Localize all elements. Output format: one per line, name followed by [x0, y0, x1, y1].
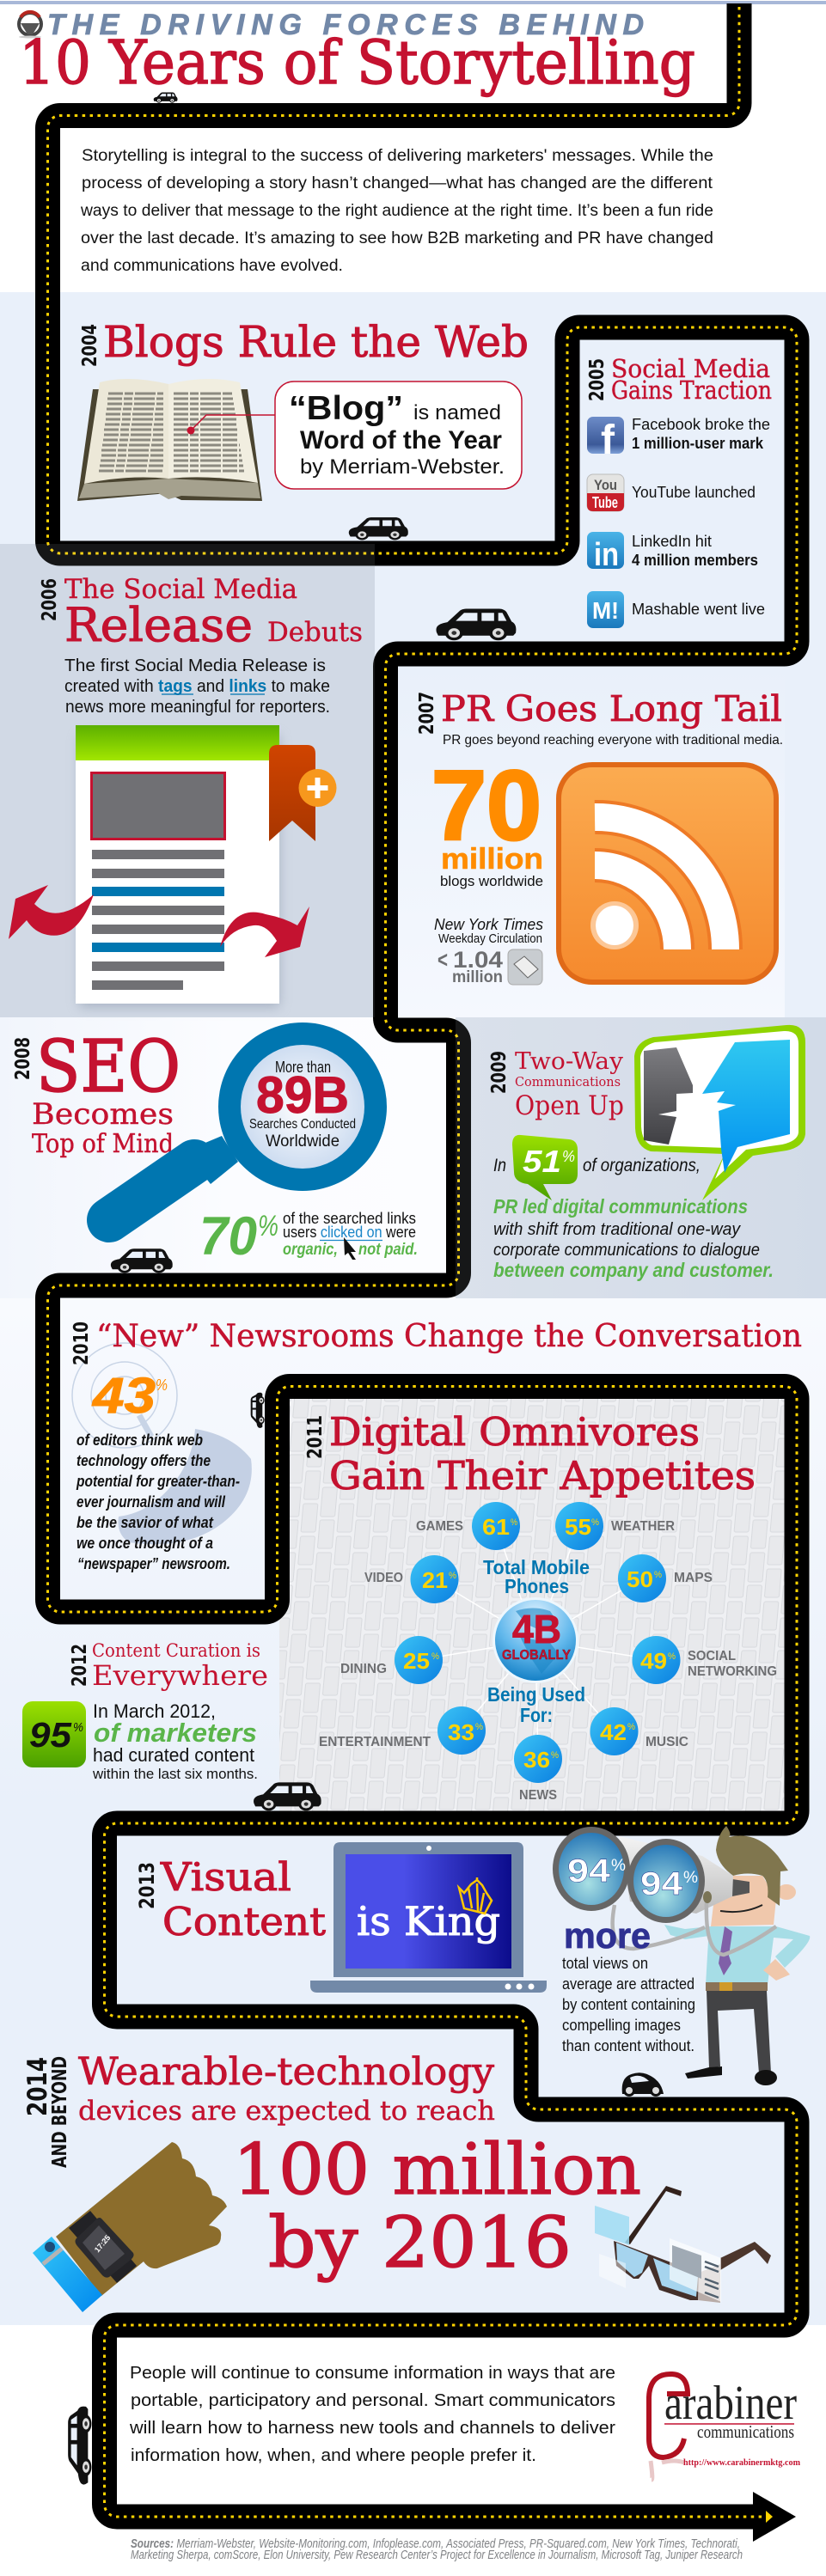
- chart labels: ENTERTAINMENT: [319, 1735, 431, 1749]
- heading: [64, 574, 363, 652]
- stat: 43 percent: %: [156, 1377, 168, 1394]
- chart: bubbles: %: [475, 1722, 483, 1732]
- description: created with tags and links to make: [64, 677, 330, 696]
- chart: bubbles: %: [431, 1651, 439, 1662]
- chart labels: MAPS: [674, 1571, 713, 1585]
- chart labels: MUSIC: [646, 1735, 688, 1749]
- chart: bubbles: 36: [523, 1747, 550, 1773]
- stat: 89B searches: 89B: [256, 1066, 349, 1124]
- icon: globe with 4B: GLOBALLY: [502, 1648, 571, 1663]
- heading: Debuts: [267, 617, 363, 648]
- icon: magnifying glass: [109, 1022, 387, 1220]
- heading: Two-Way: [515, 1048, 624, 1075]
- icon: car: [349, 517, 408, 540]
- chart labels: SOCIAL: [688, 1649, 736, 1663]
- icon: bookmark: [269, 745, 337, 841]
- heading: [32, 1025, 180, 1159]
- stat: 51 percent: [493, 1135, 701, 1200]
- heading: Gains Traction: [611, 375, 772, 405]
- connector lines: [419, 1526, 657, 1759]
- icon: facebook: [587, 417, 624, 463]
- stat: 70 percent organic: organic,: [283, 1241, 338, 1259]
- panel: 2014 wearables: [22, 2050, 771, 2312]
- description: ever journalism and will: [76, 1493, 226, 1511]
- linkedin text: LinkedIn hit: [632, 533, 712, 550]
- chart labels: [319, 1519, 777, 1803]
- stat: 70 percent organic: [199, 1206, 418, 1267]
- stat: 94 percent: %: [611, 1857, 626, 1875]
- stat: 70 million: 70: [431, 751, 541, 861]
- icon: car: [251, 1393, 265, 1428]
- intro text: process of developing a story hasn’t changed—what has changed are the different: [82, 174, 713, 192]
- stat: 51 percent: 51: [523, 1144, 561, 1179]
- heading: Wearable-technology: [78, 2050, 494, 2094]
- icon: youtube: You: [594, 477, 617, 493]
- icon: globe with 4B: [493, 1597, 578, 1683]
- caption: total mobile phones: Being Used: [487, 1683, 585, 1706]
- facebook text: [632, 416, 770, 452]
- description: had curated content: [93, 1744, 254, 1766]
- year: 2010: [70, 1322, 93, 1365]
- callout: word of the year: [187, 382, 522, 489]
- icon: laptop: [310, 1842, 547, 1993]
- year: 2008: [12, 1037, 34, 1080]
- heading: [160, 1854, 326, 1944]
- callout: word of the year: is named: [413, 401, 501, 424]
- description: more: [564, 1915, 651, 1956]
- description: [562, 1915, 695, 2054]
- heading: [515, 1048, 624, 1121]
- caption: total mobile phones: Total Mobile: [483, 1556, 590, 1578]
- icon: mashable: [587, 591, 624, 628]
- heading: Gain Their Appetites: [329, 1453, 756, 1499]
- panel: 2004 blogs: [77, 317, 529, 540]
- icon: facebook: f: [601, 418, 615, 463]
- panel: 2007 PR long tail: [416, 688, 783, 986]
- stat: 89B searches: More than: [275, 1059, 331, 1076]
- stat: 95 percent: %: [73, 1720, 83, 1735]
- closing text: information how, when, and where people prefer it.: [131, 2446, 536, 2465]
- caption: total mobile phones: Phones: [505, 1575, 569, 1597]
- year: 2012: [69, 1644, 91, 1687]
- description: than content without.: [562, 2037, 694, 2054]
- intro text: over the last decade. It’s amazing to see how B2B marketing and PR have changed: [81, 229, 713, 247]
- description: be the savior of what: [76, 1514, 214, 1531]
- stat: new york times: New York Times: [434, 916, 543, 933]
- chart: bubbles: 50: [627, 1566, 653, 1592]
- stat: 95 percent: 95: [29, 1715, 72, 1755]
- linkedin text: 4 million members: [632, 552, 758, 569]
- chart labels: WEATHER: [611, 1519, 675, 1534]
- icon: mashable: M!: [592, 597, 619, 624]
- stat: new york times: 1.04: [453, 947, 503, 973]
- heading: The Social Media: [64, 574, 297, 605]
- stat: 51 percent: %: [562, 1148, 575, 1165]
- chart: bubbles: 49: [640, 1648, 667, 1674]
- heading: Content: [162, 1899, 326, 1944]
- description: The first Social Media Release is: [64, 656, 326, 675]
- stat: 70 percent organic: 70: [199, 1206, 257, 1267]
- stat: 89B searches: Worldwide: [266, 1132, 340, 1151]
- heading: devices are expected to reach: [78, 2096, 495, 2127]
- panel: 2006 social media release: [9, 574, 363, 1007]
- heading: Open Up: [515, 1090, 624, 1121]
- heading: Becomes: [32, 1097, 174, 1132]
- heading: Content Curation is: [92, 1640, 260, 1661]
- icon: linkedin: in: [594, 537, 619, 573]
- chart: bubbles: %: [511, 1517, 517, 1528]
- chart: bubbles: %: [551, 1750, 559, 1761]
- linkedin text: [632, 533, 758, 569]
- heading: Visual: [160, 1854, 291, 1900]
- chart: bubbles: %: [668, 1651, 676, 1662]
- heading: [611, 354, 772, 405]
- stat: 100 million by 2016: [233, 2130, 641, 2284]
- callout: word of the year: Word of the Year: [300, 426, 502, 455]
- chart: bubbles: 61: [482, 1514, 510, 1540]
- heading: “New” Newsrooms Change the Conversation: [96, 1319, 802, 1354]
- logo: carabiner: communications: [697, 2421, 794, 2442]
- facebook text: Facebook broke the: [632, 416, 770, 433]
- icon: steering wheel: [19, 12, 41, 38]
- icon: crown: [459, 1877, 492, 1914]
- stat: 70 percent organic: %: [258, 1210, 278, 1242]
- description: [493, 1195, 774, 1281]
- year: 2014: [22, 2057, 53, 2116]
- chart: bubbles: 33: [448, 1719, 474, 1745]
- illustration: man with binoculars: [553, 1826, 810, 2085]
- subhead: PR goes beyond reaching everyone with traditional media.: [443, 733, 783, 748]
- panel: 2009 two-way: [488, 1025, 805, 1281]
- stat: 70 million: million: [441, 843, 543, 876]
- icon: car: [111, 1248, 173, 1273]
- heading: Blogs Rule the Web: [103, 317, 529, 367]
- chart: bubbles: 42: [600, 1719, 627, 1745]
- stat: 100 million by 2016: by 2016: [268, 2203, 572, 2284]
- stat: 70 percent organic: users clicked on were: [283, 1224, 416, 1241]
- description: news more meaningful for reporters.: [65, 698, 330, 717]
- heading: PR Goes Long Tail: [441, 688, 782, 729]
- heading: [329, 1409, 756, 1499]
- caption: total mobile phones: For:: [520, 1704, 553, 1726]
- chart labels: NETWORKING: [688, 1664, 777, 1679]
- stat: 95 percent: [22, 1701, 86, 1767]
- description: average are attracted: [562, 1975, 694, 1993]
- intro text: ways to deliver that message to the right audience at the right time. It’s been a fun ride: [80, 202, 713, 220]
- chart: bubbles: 25: [403, 1648, 430, 1674]
- icon: open book: [77, 379, 262, 501]
- arrow: red right: [220, 906, 309, 957]
- icon: smart glasses: [595, 2186, 771, 2303]
- document illustration: [76, 725, 279, 1007]
- icon: satellite dish: [72, 1343, 252, 1544]
- icon: car: [154, 93, 178, 103]
- heading: Release: [64, 598, 253, 652]
- closing text: portable, participatory and personal. Smart communicators: [131, 2391, 615, 2410]
- icon: arm with smartwatch: [33, 2142, 227, 2312]
- mashable text: Mashable went live: [632, 601, 765, 618]
- arrow: red left: [9, 885, 94, 939]
- icon: linkedin: [587, 532, 624, 573]
- description: of marketers: [94, 1718, 257, 1748]
- stat: 70 percent organic: of the searched links: [283, 1210, 416, 1227]
- stat: 89B searches: Searches Conducted: [249, 1117, 356, 1132]
- chart labels: NEWS: [519, 1788, 557, 1803]
- year: 2011: [304, 1415, 327, 1459]
- closing text: People will continue to consume information in ways that are: [130, 2364, 615, 2383]
- year: 2013: [135, 1862, 159, 1909]
- description: PR led digital communications: [493, 1195, 748, 1218]
- icon: car: [68, 2407, 91, 2485]
- chart: bubbles: %: [449, 1571, 456, 1581]
- stat: 51 percent: In: [493, 1156, 506, 1175]
- description: corporate communications to dialogue: [493, 1241, 760, 1260]
- chart: bubbles: %: [627, 1722, 635, 1732]
- icon: globe with 4B: 4B: [512, 1607, 561, 1651]
- heading: Top of Mind: [32, 1129, 174, 1159]
- icon: youtube: [587, 474, 624, 511]
- stat: 94 percent: %: [683, 1869, 698, 1887]
- icon: speech bubble: [634, 1025, 805, 1200]
- icon: laptop: is King: [357, 1898, 500, 1944]
- callout: word of the year: “Blog”: [289, 390, 403, 427]
- icon: arm with smartwatch: 17:25: [93, 2233, 112, 2254]
- description: [92, 1700, 258, 1782]
- heading: SEO: [36, 1025, 180, 1108]
- stat: 94 percent: 94: [640, 1866, 682, 1902]
- year: AND BEYOND: [49, 2056, 71, 2168]
- heading: Digital Omnivores: [329, 1409, 700, 1455]
- chart: bubbles: %: [591, 1517, 599, 1528]
- description: potential for greater-than-: [76, 1473, 240, 1490]
- panel: 2008 SEO: [12, 1022, 418, 1273]
- panel: 2011 digital omnivores: [304, 1409, 777, 1803]
- logo: carabiner: arabiner: [664, 2377, 797, 2430]
- heading: Communications: [515, 1074, 621, 1090]
- description: with shift from traditional one-way: [493, 1220, 741, 1239]
- youtube text: YouTube launched: [632, 484, 756, 501]
- intro text: [80, 147, 713, 275]
- stat: 43 percent: 43: [92, 1368, 156, 1424]
- chart labels: VIDEO: [364, 1571, 403, 1585]
- year: 2004: [79, 324, 101, 367]
- description: [76, 1431, 240, 1572]
- icon: rss: [556, 762, 779, 985]
- icon: car: [254, 1782, 321, 1810]
- icon: youtube: Tube: [592, 494, 618, 511]
- stat: new york times: <: [437, 947, 448, 973]
- chart: bubbles: 21: [422, 1567, 448, 1593]
- chart: bubbles: [395, 1502, 681, 1783]
- description: of editors think web: [76, 1431, 203, 1449]
- stat: 100 million by 2016: 100 million: [233, 2130, 641, 2211]
- closing text: [129, 2364, 615, 2465]
- stat: 51 percent: of organizations,: [583, 1156, 701, 1175]
- heading: Everywhere: [92, 1659, 268, 1692]
- intro text: and communications have evolved.: [81, 257, 343, 275]
- description: total views on: [562, 1955, 648, 1972]
- stat: new york times: Weekday Circulation: [438, 931, 542, 946]
- stat: new york times: [434, 916, 543, 986]
- description: within the last six months.: [92, 1766, 258, 1782]
- caption: total mobile phones: [483, 1556, 590, 1726]
- year: 2007: [416, 692, 438, 735]
- stat: 94 percent: 94: [567, 1853, 610, 1889]
- panel: 2005 social media: [436, 354, 772, 640]
- description: by content containing: [562, 1996, 695, 2013]
- logo: carabiner: http://www.carabinermktg.com: [683, 2458, 801, 2468]
- description: compelling images: [562, 2017, 681, 2034]
- callout: word of the year: by Merriam-Webster.: [300, 455, 505, 479]
- chart: bubbles: 55: [565, 1514, 591, 1540]
- closing panel: [68, 2364, 801, 2562]
- panel: 2013 visual content: [135, 1826, 810, 2097]
- icon: smart car: [622, 2072, 664, 2097]
- header: [19, 9, 695, 103]
- logo: carabiner: [649, 2374, 801, 2480]
- description: In March 2012,: [93, 1700, 216, 1722]
- stat: new york times: million: [452, 968, 503, 986]
- year: [22, 2056, 71, 2168]
- facebook text: 1 million-user mark: [632, 435, 764, 452]
- panel: 2010 newsrooms: [70, 1319, 802, 1572]
- description: we once thought of a: [76, 1535, 213, 1552]
- intro text: Storytelling is integral to the success of delivering marketers' messages. While the: [82, 147, 713, 165]
- title: 10 Years of Storytelling: [19, 27, 695, 98]
- chart labels: GAMES: [416, 1519, 463, 1534]
- description: between company and customer.: [493, 1259, 774, 1281]
- closing text: will learn how to harness new tools and channels to deliver: [129, 2419, 615, 2438]
- stat: 89B searches: [249, 1059, 356, 1151]
- heading: the driving forces behind: THE DRIVING FORCES BEHIND: [47, 9, 644, 41]
- sources: [131, 2536, 743, 2562]
- icon: car: [436, 609, 516, 640]
- stat: 94 percent: [567, 1853, 698, 1902]
- chart: bubbles: %: [654, 1570, 662, 1580]
- description: [64, 656, 330, 717]
- year: 2005: [586, 358, 609, 401]
- stat: 70 million: blogs worldwide: [440, 873, 543, 889]
- chart labels: DINING: [340, 1662, 387, 1676]
- year: 2006: [39, 578, 61, 621]
- year: 2009: [488, 1051, 511, 1094]
- description: “newspaper” newsroom.: [77, 1555, 230, 1572]
- heading: [92, 1640, 268, 1692]
- heading: [78, 2050, 495, 2127]
- panel: 2012 content curation: [22, 1640, 321, 1810]
- stat: 70 percent organic: not paid.: [358, 1241, 418, 1259]
- heading: Social Media: [611, 354, 770, 383]
- description: technology offers the: [76, 1452, 211, 1469]
